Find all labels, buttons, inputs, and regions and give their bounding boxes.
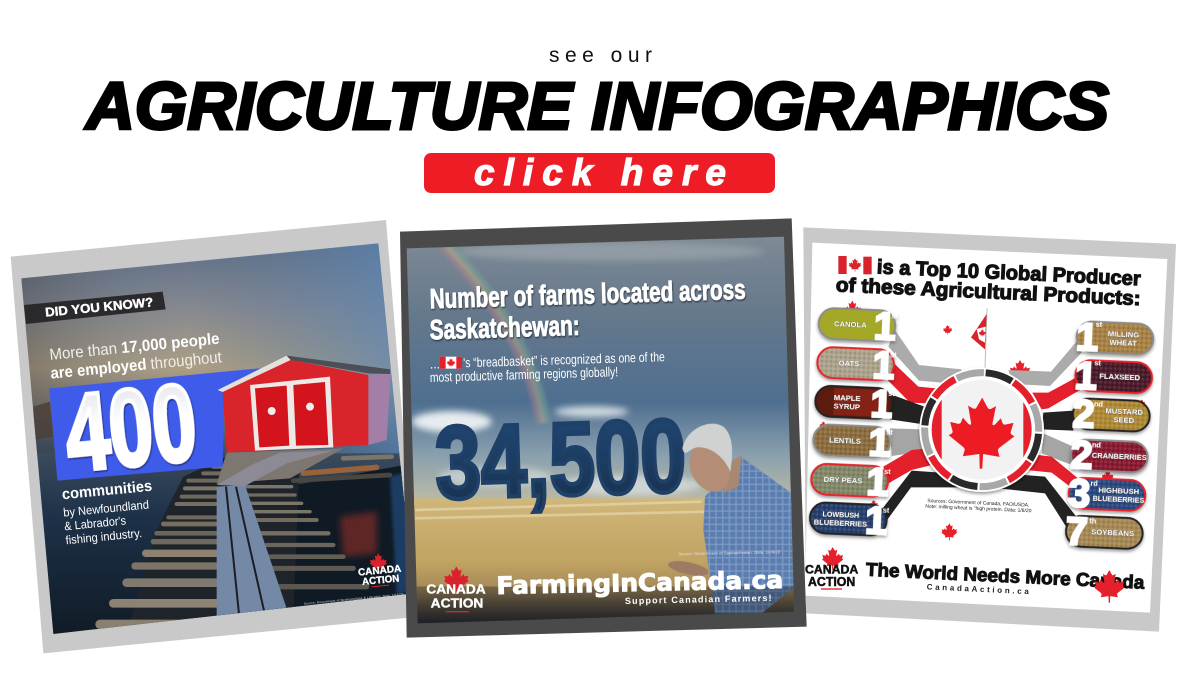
pill: flaxseed: st (1094, 358, 1102, 367)
pill: mustard seed: nd (1094, 399, 1103, 409)
pill: flaxseed: 1 (1074, 354, 1098, 399)
pill: milling wheat: st (1095, 319, 1103, 329)
pill: lentils (812, 418, 894, 465)
heading: Number of farms located across (429, 274, 746, 314)
farmer (667, 424, 795, 613)
subtext with flag: 's “breadbasket” is recognized as one of the (463, 349, 665, 370)
pill: dry peas: st (884, 467, 891, 476)
pill: maple syrup (814, 379, 896, 427)
pill: highbush blueberries (1067, 471, 1146, 519)
dock deck (217, 448, 343, 484)
subtext with flag: ... (430, 356, 440, 372)
logo: canada action: CANADA (358, 564, 402, 579)
pill: cranberries: nd (1092, 440, 1101, 450)
logo: canada action: ACTION (431, 595, 483, 610)
logo: canada action: ACTION (808, 575, 855, 589)
panel: saskatchewan farms infographic (395, 218, 808, 638)
pill: mustard seed (1072, 392, 1151, 439)
pill: milling wheat: WHEAT (1109, 338, 1137, 348)
pill: oats: 1 (872, 343, 895, 388)
dark water and reflection (130, 453, 413, 622)
intro text: are employed throughout (50, 349, 223, 383)
logo: canada action (358, 553, 402, 588)
button: click here: click here (474, 152, 726, 193)
icon: maple leaf over tagline (1094, 570, 1125, 603)
logo: canada action: ACTION (362, 573, 400, 588)
pill: soybeans (1065, 509, 1144, 557)
pill: dry peas: DRY PEAS (823, 475, 863, 486)
pill: mustard seed: SEED (1113, 415, 1135, 425)
tagline: Support Canadian Farmers! (625, 593, 772, 606)
pill: oats (816, 341, 898, 388)
logo: canada action: CANADA (426, 582, 486, 596)
pill: highbush blueberries: 3 (1067, 471, 1091, 516)
pill: canola: CANOLA (834, 319, 867, 330)
pill: soybeans: SOYBEANS (1091, 527, 1134, 538)
big number 34,500: 34,500 (433, 397, 688, 521)
pill: oats: st (890, 350, 897, 359)
pill: highbush blueberries: HIGHBUSH (1098, 486, 1140, 496)
pill: canola (818, 302, 899, 349)
logo: canada action (805, 547, 859, 590)
logo: canada action (426, 566, 486, 612)
pill: mustard seed: MUSTARD (1105, 406, 1144, 417)
pill: milling wheat: MILLING (1108, 329, 1139, 340)
pill: maple syrup: 1 (870, 382, 893, 427)
source note: Sources: Government of Canada, FAO/USDA. (927, 498, 1030, 509)
heading: is a Top 10 Global Producer (876, 256, 1141, 290)
pill: flaxseed (1074, 354, 1153, 401)
title: AGRICULTURE INFOGRAPHICS (84, 69, 1109, 144)
pill: canola: 1 (873, 304, 897, 349)
pill: lentils: LENTILS (829, 436, 861, 446)
pill: lowbush blueberries: 1 (864, 498, 888, 543)
website: CanadaAction.ca (927, 582, 1032, 596)
pill: lowbush blueberries (809, 496, 890, 543)
pill: milling wheat: 1 (1075, 315, 1099, 360)
icon: flag on pole (971, 308, 987, 368)
pill: soybeans: 7 (1065, 509, 1089, 554)
pill: mustard seed: 2 (1072, 392, 1096, 437)
dock boardwalk (217, 451, 333, 618)
text: communities (61, 478, 153, 547)
intro text (49, 331, 223, 383)
heading: Saskatchewan: (429, 310, 580, 345)
pill: milling wheat (1075, 315, 1154, 362)
pill: cranberries: CRANBERRIES (1092, 451, 1147, 462)
pill: lentils: st (886, 427, 893, 437)
pill: highbush blueberries: BLUEBERRIES (1092, 494, 1144, 505)
pill: dry peas: 1 (866, 460, 889, 505)
pill: lowbush blueberries: st (883, 505, 890, 515)
pill: oats: OATS (838, 359, 860, 368)
pill: lowbush blueberries: LOWBUSH (822, 510, 860, 520)
pill: cranberries: 2 (1070, 433, 1094, 478)
pill: dry peas (810, 457, 892, 505)
pill: lowbush blueberries: BLUEBERRIES (814, 517, 867, 529)
pill: flaxseed: FLAXSEED (1099, 372, 1141, 383)
source note: Source: Government of Saskatchewan. Data: 1/24/22 (678, 549, 781, 556)
badge: did you know (24, 292, 166, 324)
website: FarmingInCanada.ca (496, 566, 783, 600)
red shed (218, 356, 391, 453)
source note: Note: milling wheat is "high protein. Data: 1/8/20 (925, 504, 1032, 514)
panel: top 10 global producer infographic (803, 227, 1176, 632)
heading (835, 256, 1141, 310)
badge: did you know: DID YOU KNOW? (45, 295, 154, 320)
panel: newfoundland fishing infographic (0, 220, 420, 653)
subtext with flag (430, 349, 665, 385)
wheat horizon (415, 502, 705, 518)
rainbow (442, 245, 548, 423)
source note (925, 498, 1032, 514)
subheading: see our: see our (549, 44, 652, 67)
heading: of these Agricultural Products: (835, 274, 1141, 310)
source note: Source: Government of Newfoundland & Labrador. Date: 1/15/24 (304, 592, 404, 606)
text: communities: & Labrador's (64, 513, 127, 533)
subtext with flag: most productive farming regions globally! (430, 364, 618, 385)
logo: canada action: CANADA (805, 562, 859, 576)
center emblem: flag roundel (918, 368, 1046, 496)
text: communities: by Newfoundland (63, 497, 150, 520)
text: communities: fishing industry. (65, 526, 143, 547)
intro text: More than 17,000 people (49, 331, 220, 364)
pill: lentils: 1 (868, 420, 891, 465)
pill: maple syrup: SYRUP (833, 401, 860, 412)
pill: canola: st (891, 311, 899, 320)
dock logs (100, 457, 392, 624)
pill: soybeans: th (1089, 516, 1097, 525)
big number 400: 400 (60, 361, 202, 496)
connector bands (881, 330, 1082, 528)
blue banner (49, 368, 260, 481)
decorative maple leaves (820, 301, 1145, 541)
tagline: The World Needs More Canada (865, 559, 1145, 593)
clouds (412, 242, 765, 495)
icon: canadian flag in heading (838, 256, 872, 274)
pill: cranberries (1070, 433, 1149, 480)
pill: maple syrup: MAPLE (834, 393, 861, 403)
text: communities: communities (61, 478, 153, 503)
pill: maple syrup: st (888, 389, 895, 398)
pill: highbush blueberries: rd (1090, 479, 1098, 488)
heading (429, 274, 746, 345)
